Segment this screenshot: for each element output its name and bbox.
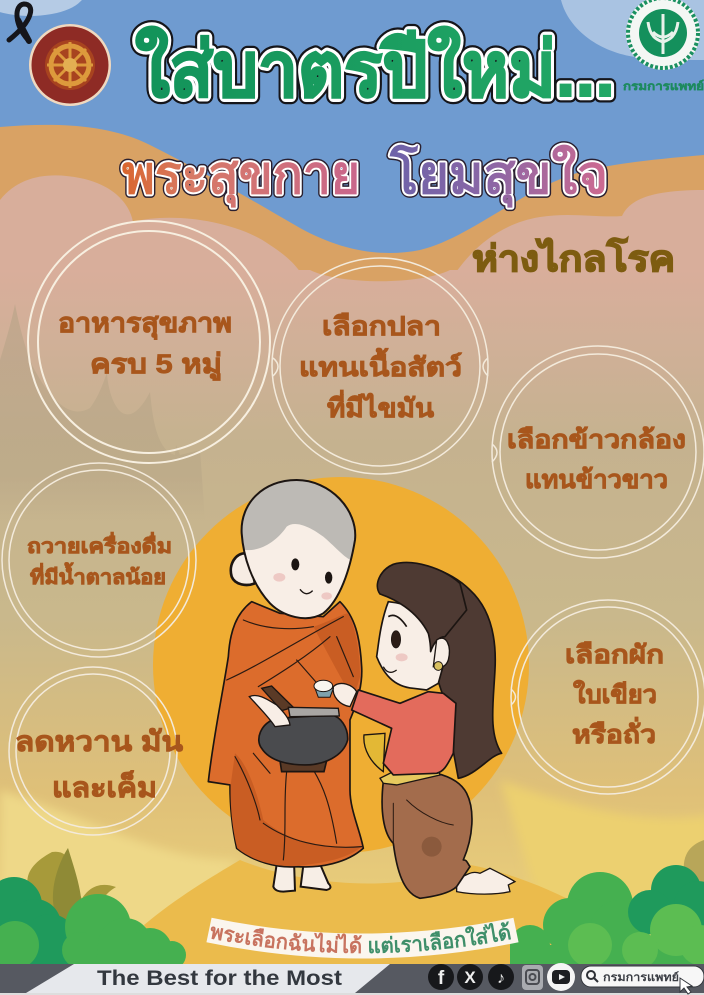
pink clouds — [0, 175, 704, 470]
cursor — [680, 978, 692, 994]
ring: fish — [272, 258, 488, 474]
woman feet — [457, 868, 515, 894]
icon: youtube — [547, 963, 575, 991]
text: choose fish — [299, 311, 462, 423]
text: brown rice: แทนข้าวขาว — [525, 466, 668, 494]
woman blouse — [352, 690, 456, 775]
subtitle: monk healthy: พระสุขกาย — [122, 146, 360, 208]
ring: drinks — [2, 463, 196, 657]
text: green vegetables — [565, 641, 664, 749]
woman fringe — [377, 563, 467, 652]
subtitle: layperson happy: โยมสุขใจ — [389, 144, 608, 208]
monk robe — [208, 602, 363, 867]
woman ear — [433, 638, 449, 667]
illustration: monk and woman — [208, 480, 515, 898]
woman hair back — [393, 563, 502, 778]
woman smile — [383, 667, 397, 672]
title: ใส่บาตรปีใหม่... — [135, 26, 615, 113]
light bush left — [0, 894, 186, 972]
text: less sweet fat salt — [15, 726, 183, 803]
ground right light — [500, 780, 704, 970]
olive leaves right — [684, 840, 704, 890]
dark bush left — [0, 877, 90, 966]
background gradient lower field — [0, 270, 704, 965]
offered rice — [314, 680, 333, 697]
monk hand — [249, 695, 290, 727]
logo caption: กรมการแพทย์ — [623, 79, 704, 93]
icon: facebook — [428, 964, 454, 990]
search pill: กรมการแพทย์ — [603, 971, 679, 984]
icon: x: X — [464, 968, 476, 987]
logo: ministry of public health — [623, 0, 704, 93]
skirt folds — [393, 800, 453, 843]
arm strap — [262, 686, 293, 711]
subtitle: layperson happy: โยมสุขใจ — [389, 144, 608, 208]
mourning ribbon — [9, 4, 31, 41]
cloud top left — [0, 0, 85, 16]
dark bush right — [628, 865, 704, 934]
temple silhouette — [0, 304, 205, 520]
title: ใส่บาตรปีใหม่... — [135, 26, 615, 113]
text: choose fish: แทนเนื้อสัตว์ — [299, 347, 462, 382]
title: ใส่บาตรปีใหม่... — [135, 26, 615, 113]
monk hair — [242, 480, 355, 560]
text: choose fish: เลือกปลา — [322, 311, 441, 341]
icon: facebook: f — [438, 968, 445, 989]
ring: food group five — [28, 221, 270, 463]
icon: x — [457, 964, 483, 990]
text: green vegetables: เลือกผัก — [565, 641, 664, 669]
olive leaves left — [27, 848, 116, 925]
monk face — [242, 480, 355, 618]
skirt pattern dot — [422, 837, 442, 857]
monk feet — [273, 860, 330, 892]
monk smile — [300, 589, 313, 594]
subtitle: monk healthy: พระสุขกาย — [122, 146, 360, 208]
woman brow — [388, 615, 407, 627]
text: wholesome food: อาหารสุขภาพ — [58, 308, 232, 340]
ground path — [144, 860, 620, 965]
subtitle: monk healthy: พระสุขกาย — [122, 146, 360, 208]
text: choose fish: ที่มีไขมัน — [327, 389, 434, 423]
icon: instagram — [522, 965, 543, 990]
subtitle: layperson happy: โยมสุขใจ — [389, 144, 608, 208]
woman food bowl — [364, 733, 385, 772]
slogan banner: พระเลือกฉันไม่ได้ แต่เราเลือกใส่ได้ — [210, 921, 511, 954]
ground left light — [0, 790, 240, 970]
icon: tiktok — [488, 964, 514, 990]
text: low sugar drinks: ถวายเครื่องดื่ม — [27, 531, 172, 558]
monk robe folds — [227, 617, 362, 860]
plants right — [510, 840, 704, 968]
text: brown rice — [507, 426, 686, 494]
woman face — [377, 602, 447, 690]
text: brown rice: เลือกข้าวกล้อง — [507, 426, 686, 454]
woman sash — [380, 770, 440, 785]
monk head outline — [242, 480, 355, 618]
monk head — [231, 480, 355, 618]
ring: less sweet — [9, 667, 177, 835]
icon: tiktok: ♪ — [497, 970, 505, 987]
search pill — [581, 966, 704, 994]
heading: far from disease: ห่างไกลโรค — [472, 237, 675, 279]
text: less sweet fat salt: และเค็ม — [52, 770, 157, 803]
ring: vegetables — [511, 600, 704, 794]
earring — [434, 662, 443, 670]
text: low sugar drinks: ที่มีน้ำตาลน้อย — [30, 562, 166, 589]
light bush right — [510, 872, 704, 965]
sun circle — [153, 477, 529, 853]
monk eyes — [291, 558, 332, 584]
text: green vegetables: ใบเขียว — [573, 679, 657, 709]
ring: brown rice — [492, 346, 704, 558]
text: wholesome food — [58, 308, 232, 381]
front bush right — [568, 904, 704, 968]
woman hand — [333, 683, 357, 707]
text: wholesome food: ครบ 5 หมู่ — [90, 349, 222, 381]
cloud top right — [561, 0, 704, 60]
text: low sugar drinks — [27, 531, 172, 589]
plants left — [0, 848, 186, 972]
footer bar — [0, 963, 704, 995]
monk robe shading — [231, 613, 362, 866]
text: less sweet fat salt: ลดหวาน มัน — [15, 726, 183, 757]
woman eye — [391, 631, 401, 648]
orange wave — [0, 125, 704, 400]
monk ear — [231, 553, 255, 585]
alms bowl — [259, 707, 348, 772]
logo: monk agency seal — [29, 24, 111, 106]
woman cheek — [396, 653, 408, 661]
footer tagline: The Best for the Most — [97, 967, 342, 990]
text: green vegetables: หรือถั่ว — [572, 717, 656, 749]
monk cheeks — [273, 573, 332, 600]
woman skirt — [382, 773, 472, 898]
